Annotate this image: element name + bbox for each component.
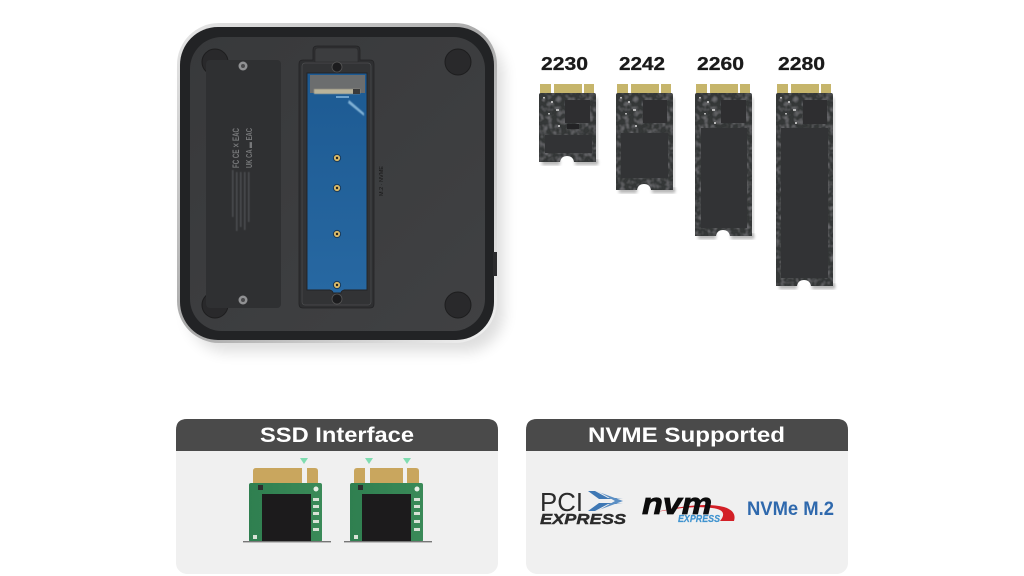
SSD 2230 [539,84,598,165]
rubber feet [202,49,471,318]
cover plate: UK CA ▬ EAC [245,128,254,168]
logo: NVM Express: nvm [642,486,712,521]
logo text: NVMe M.2: NVMe M.2 [747,499,834,520]
mounting holes [333,154,341,289]
logo: PCI Express: PCI [540,487,583,517]
M key SSD [243,458,331,542]
panel: NVME Supported [526,419,848,574]
logo: NVM Express [642,486,735,525]
heading: SSD Interface: SSD Interface [260,424,414,447]
SSD 2242 [616,84,675,193]
logo: PCI Express [540,487,626,528]
cover plate [206,60,281,308]
panel heading bar [176,419,498,451]
product: docking enclosure underside [177,23,504,352]
size labels: 2230 [541,54,588,74]
panel: SSD Interface [176,419,498,574]
heading: NVME Supported: NVME Supported [588,424,785,447]
logo: NVM Express: EXPRESS [678,513,720,525]
SSD 2280 [776,84,835,289]
M.2 bay [299,46,374,308]
B+M key SSD [344,458,432,542]
regulatory marks: FC CE ⨯ EAC [231,128,241,168]
size labels: 2260 [697,54,744,74]
logo: PCI Express: EXPRESS [540,511,626,528]
size labels: 2242 [619,54,665,74]
bay label: M.2 · NVME [379,166,385,196]
blue board [307,73,367,293]
size labels: 2280 [778,54,825,74]
panel heading bar [526,419,848,451]
size labels [541,54,825,74]
SSD 2260 [695,84,754,239]
